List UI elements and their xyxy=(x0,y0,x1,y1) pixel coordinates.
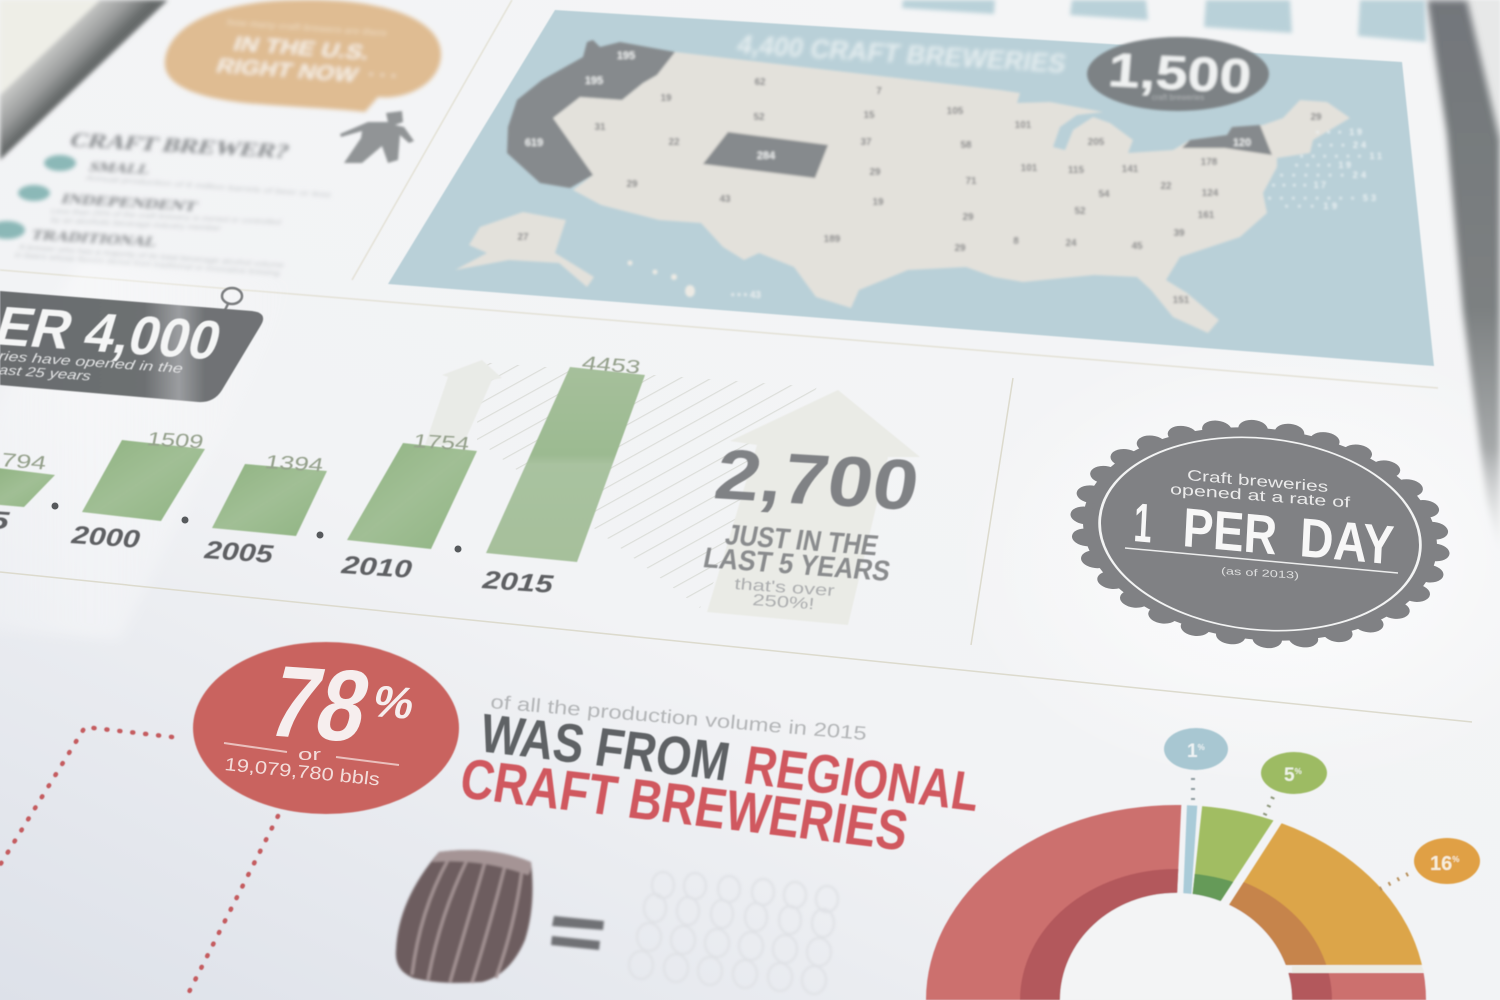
state numbers: 15 xyxy=(863,110,875,121)
state numbers: 54 xyxy=(1098,189,1110,200)
state numbers: 29 xyxy=(962,212,974,223)
barrels value: 19,079,780 bbls xyxy=(224,754,381,789)
icon: barrel xyxy=(396,850,533,983)
state numbers: 71 xyxy=(965,176,977,187)
sign ring xyxy=(222,288,242,312)
sub caption: that's over xyxy=(734,575,836,600)
badge text: Craft breweries xyxy=(1187,467,1328,496)
strip xyxy=(1292,964,1424,973)
state numbers: • • • 43 xyxy=(731,290,761,301)
callout: 1,500: craft breweries xyxy=(1152,93,1204,102)
state numbers: 43 xyxy=(719,194,731,205)
panel: US map xyxy=(388,10,1434,366)
callout: 16 percent xyxy=(1378,838,1480,890)
state numbers: 62 xyxy=(754,77,766,88)
callout: 1 percent xyxy=(1164,728,1228,802)
segment: green xyxy=(1192,806,1274,902)
line one: WAS FROM xyxy=(476,703,734,793)
state numbers: 52 xyxy=(753,112,765,123)
state numbers xyxy=(517,50,1382,306)
east coast callouts xyxy=(1268,127,1382,211)
donut chart xyxy=(926,805,1426,1000)
divider lines xyxy=(0,0,1438,388)
state numbers: 178 xyxy=(1201,157,1218,168)
state numbers: 7 xyxy=(876,86,882,97)
frame corner top left xyxy=(0,0,168,160)
badge text xyxy=(1170,467,1351,512)
badge headline: 1 xyxy=(1132,491,1153,555)
list text xyxy=(28,159,200,250)
soft highlight xyxy=(950,330,1500,790)
axis dots xyxy=(52,502,462,552)
state numbers: 39 xyxy=(1173,228,1185,239)
east coast callouts: • • • • 17 xyxy=(1272,180,1326,190)
callout: 2,700 arrow: LAST 5 YEARS xyxy=(701,541,893,587)
top blue blocks xyxy=(902,0,1426,42)
list text: TRADITIONAL xyxy=(28,227,160,250)
badge: 1 per day xyxy=(1072,410,1448,658)
bubble text: . . . xyxy=(367,63,400,80)
circle: 78 percent: % xyxy=(367,677,420,729)
big number: 78 xyxy=(258,645,381,763)
state numbers: 189 xyxy=(824,234,841,245)
state numbers: 8 xyxy=(1013,236,1019,247)
icon grid: hops xyxy=(629,872,838,994)
list small print: Annual production of 6 million barrels of beer or less xyxy=(84,173,333,199)
list text: INDEPENDENT xyxy=(58,191,200,215)
small arrow xyxy=(425,360,502,445)
badge headline: PER xyxy=(1181,496,1278,566)
callout: 1 percent: 1 xyxy=(1187,741,1198,762)
glare band xyxy=(0,260,300,640)
state numbers: 29 xyxy=(954,243,966,254)
dark states xyxy=(507,40,1272,188)
state numbers: 101 xyxy=(1015,120,1032,131)
equals sign xyxy=(551,916,604,950)
badge text: opened at a rate of xyxy=(1170,481,1351,512)
bar values: 1394 xyxy=(263,452,326,476)
list small print: A brewer who has a majority of its total beverage alcohol volume xyxy=(17,242,286,269)
callout: 1,500: 1,500 xyxy=(1106,43,1253,104)
state numbers: 31 xyxy=(594,122,606,133)
callout: 1,500 xyxy=(1087,37,1269,111)
state numbers: 619 xyxy=(525,137,543,149)
badge headline: DAY xyxy=(1298,506,1395,576)
land: Hawaii xyxy=(628,260,695,297)
state numbers: 195 xyxy=(585,75,603,87)
badge headline xyxy=(1132,491,1395,576)
state numbers: 24 xyxy=(1065,238,1077,249)
state numbers: 195 xyxy=(617,50,635,62)
east coast callouts: • • • • • • 11 xyxy=(1300,151,1382,161)
state numbers: 58 xyxy=(960,140,972,151)
state numbers: 105 xyxy=(947,106,964,117)
sign caption: ries have opened in the xyxy=(0,348,184,376)
state numbers: 161 xyxy=(1198,210,1215,221)
callout: 16 percent: 16 xyxy=(1430,853,1452,875)
year labels xyxy=(0,506,556,599)
segment: regional red xyxy=(925,804,1182,1000)
bar values: 1754 xyxy=(411,431,472,455)
frame right edge xyxy=(1427,0,1500,560)
callout: 5 percent xyxy=(1261,752,1327,821)
dotted connector lines xyxy=(0,727,278,998)
sub caption xyxy=(734,575,836,613)
east coast callouts: • • • • • • • • 53 xyxy=(1268,193,1376,203)
callout: 2,700 arrow xyxy=(701,390,925,625)
bubble text: IN THE U.S. xyxy=(230,33,373,64)
year labels: 2015 xyxy=(480,566,556,599)
heading: regional craft breweries: REGIONAL xyxy=(740,735,984,823)
number: 2,700 xyxy=(709,435,925,525)
state numbers: 29 xyxy=(869,167,881,178)
bar values: 4453 xyxy=(580,353,642,379)
list text: SMALL xyxy=(86,159,153,178)
state numbers: 27 xyxy=(517,232,529,243)
callout: 1 percent: % xyxy=(1198,743,1205,752)
bars xyxy=(0,367,645,562)
map background xyxy=(388,10,1434,366)
heading: regional craft breweries xyxy=(456,692,984,862)
divider and or xyxy=(224,743,399,765)
circle: 78 percent: or xyxy=(298,745,322,764)
sign: over 4,000 xyxy=(0,288,263,402)
panel: bar chart xyxy=(0,353,817,608)
callout: 5 percent: % xyxy=(1295,767,1302,776)
state numbers: 124 xyxy=(1202,188,1219,199)
state numbers: 52 xyxy=(1074,206,1086,217)
state numbers: 19 xyxy=(660,93,672,104)
icon: person xyxy=(340,111,414,163)
east coast callouts: • • • • • • 24 xyxy=(1280,170,1366,180)
segment: red right xyxy=(1288,972,1427,1000)
state numbers: 284 xyxy=(757,150,776,162)
state numbers: 141 xyxy=(1122,164,1139,175)
badge note: (as of 2013) xyxy=(1221,566,1299,582)
east coast callouts: • • • 24 xyxy=(1318,140,1366,150)
hatching xyxy=(477,362,817,608)
state numbers: 151 xyxy=(1173,295,1190,306)
list small print: by an alcoholic beverage industry member xyxy=(49,215,223,232)
list markers xyxy=(0,155,76,239)
state numbers: 45 xyxy=(1131,241,1143,252)
state numbers: 29 xyxy=(1310,112,1322,123)
map title: 4,400 CRAFT BREWERIES xyxy=(735,29,1069,79)
bubble text: how many craft brewers are there xyxy=(225,17,389,38)
state numbers: 22 xyxy=(1160,181,1172,192)
panel: speech bubble xyxy=(165,0,441,112)
callout: 5 percent: 5 xyxy=(1284,765,1295,786)
bar values: 1509 xyxy=(145,429,205,453)
state numbers: 205 xyxy=(1088,137,1105,148)
east coast callouts: • • • • 19 xyxy=(1295,160,1351,170)
bar values: 794 xyxy=(0,450,49,475)
east coast callouts: • • • 19 xyxy=(1316,127,1362,137)
land: Alaska xyxy=(455,212,594,287)
state numbers: 120 xyxy=(1233,137,1251,149)
list small print: in beers whose flavors derive from traditional or innovative brewing xyxy=(13,250,282,277)
sub caption: 250%! xyxy=(752,591,815,613)
year labels: 2005 xyxy=(202,536,275,569)
state numbers: 115 xyxy=(1068,165,1085,176)
state numbers: 19 xyxy=(872,197,884,208)
list small print xyxy=(13,173,333,277)
line two: CRAFT BREWERIES xyxy=(456,747,913,862)
state numbers: 37 xyxy=(860,137,872,148)
segment: orange xyxy=(1228,822,1422,966)
circle: 78 percent xyxy=(193,642,459,814)
segment: blue xyxy=(1182,804,1198,894)
bar values xyxy=(0,353,642,476)
year labels: 2000 xyxy=(69,521,141,554)
east coast callouts: • • • 19 xyxy=(1285,201,1337,211)
list small print: Less than 25% of the craft brewery is owned or controlled xyxy=(49,206,283,226)
sign caption xyxy=(0,348,184,383)
section divider lines xyxy=(0,378,1472,722)
kicker: of all the production volume in 2015 xyxy=(490,692,868,745)
land: contiguous states xyxy=(553,52,1350,333)
heading: craft brewer: CRAFT BREWER? xyxy=(66,129,293,163)
panel: craft brewer list xyxy=(0,129,333,277)
state numbers: 22 xyxy=(668,137,680,148)
callout: 16 percent: % xyxy=(1452,855,1459,864)
state numbers: 29 xyxy=(626,179,638,190)
bubble text xyxy=(213,17,400,87)
state numbers: 101 xyxy=(1021,163,1038,174)
year labels: 2010 xyxy=(339,551,413,584)
bubble text: RIGHT NOW xyxy=(213,55,362,87)
donut hole xyxy=(1060,893,1292,1000)
caption: JUST IN THE xyxy=(723,518,881,561)
